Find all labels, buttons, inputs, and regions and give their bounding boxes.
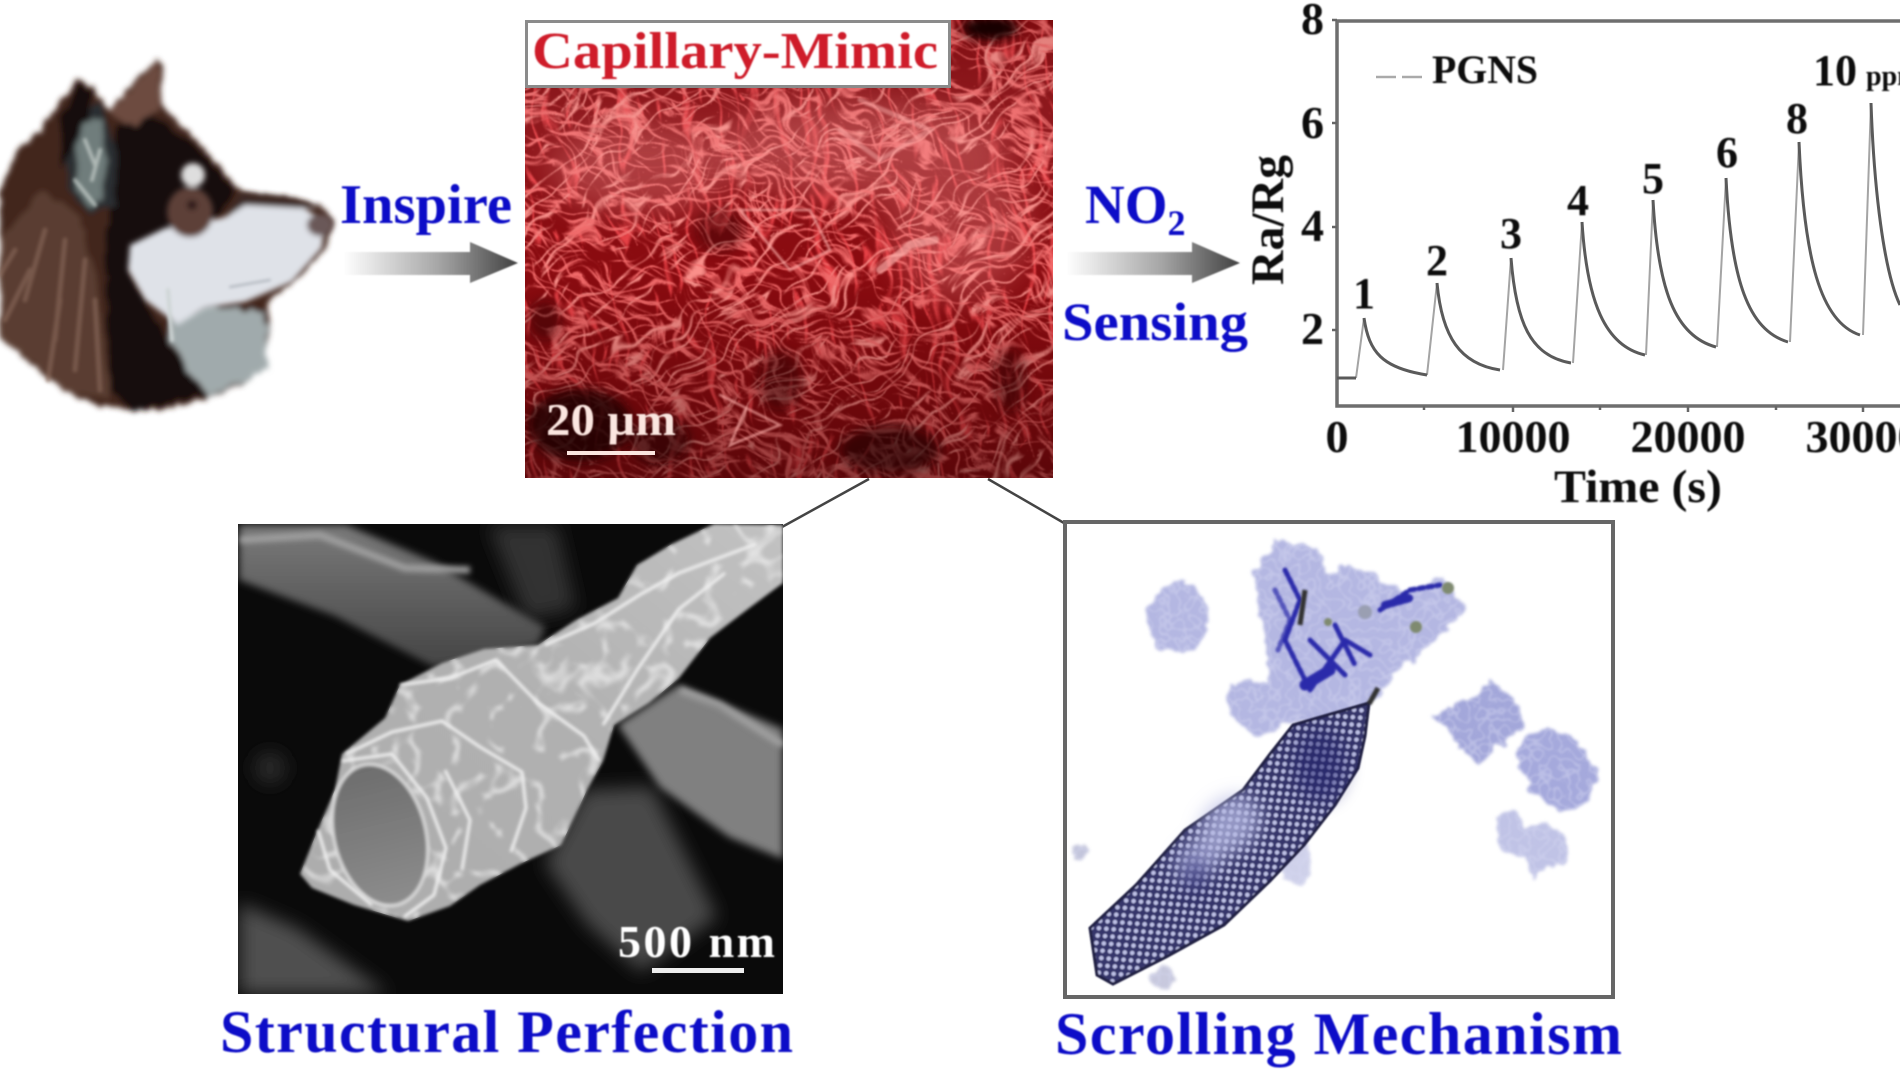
label: NO2: 2 [1168,203,1186,243]
label: Inspire: Inspire [340,174,512,236]
panel: SEM image of scrolled tube [238,524,783,994]
peak concentration labels: 1 [1353,269,1375,318]
dark voids in fibre mat [528,16,1026,474]
dark blue polymer fragments [1275,570,1440,690]
panel: capillary-mimic red micrograph [525,20,1900,478]
response rise segments [1356,103,1871,378]
panel: scrolling mechanism simulation [1065,522,1613,997]
scale bar: 500 nm: 500 nm [618,916,775,967]
y axis tick labels: 4 [1301,200,1324,251]
peak concentration labels: 4 [1567,176,1589,225]
arrow: inspire [343,242,518,283]
label: Sensing: Sensing [1062,292,1248,352]
y axis tick labels: 2 [1301,303,1324,354]
x axis tick labels [1326,411,1900,462]
nanotube with lattice [1090,703,1369,984]
x axis tick labels: 20000 [1630,411,1746,462]
highlighted fibres [720,100,935,445]
scale bar: 20 µm: 20 µm [546,394,676,445]
caption: Scrolling Mechanism: Scrolling Mechanism [1055,1001,1622,1067]
legend: PGNS [1432,47,1538,92]
fibre layer: deep [525,20,1053,478]
tube body [300,524,783,921]
peak concentration labels: 10 [1813,46,1857,95]
arrow: sensing [1066,242,1240,283]
connector line to SEM image [782,479,869,527]
bright fibre band [550,100,1030,300]
x axis tick labels: 0 [1326,411,1348,462]
caption: Structural Perfection: Structural Perfection [220,999,793,1065]
molecule clusters [1073,540,1598,991]
image: dog head in profile [0,57,333,412]
label box: Capillary-Mimic: Capillary-Mimic [532,23,938,80]
tube opening [330,762,430,908]
axes frame [1337,21,1900,406]
wrinkle highlights [318,544,756,917]
y axis tick labels [1301,0,1324,354]
response decay curve [1337,103,1900,378]
y axis tick labels: 6 [1301,97,1324,148]
x axis tick labels: 10000 [1456,411,1570,462]
peak concentration labels: 2 [1426,236,1448,285]
peak concentration labels: 5 [1642,154,1664,203]
label: NO2: NO [1085,174,1168,235]
axis ticks [1332,20,1863,412]
peak concentration labels: 6 [1716,128,1738,177]
x axis title: Time (s) [1554,461,1722,513]
adsorbed molecules on tube [1167,783,1273,890]
y axis title: Ra/Rg [1242,155,1294,285]
peak concentration labels: 3 [1500,209,1522,258]
peak concentration labels: 8 [1786,94,1808,143]
tube wrinkle texture [300,524,783,921]
background fibres [239,525,717,994]
small grey-green atoms [1324,582,1454,633]
chart: Ra/Rg response vs time [1242,0,1900,513]
peak concentration labels [1353,46,1857,318]
panel frame [1065,522,1613,997]
connector line to simulation panel [988,479,1064,523]
fibre layers: upper mat [525,20,1053,478]
